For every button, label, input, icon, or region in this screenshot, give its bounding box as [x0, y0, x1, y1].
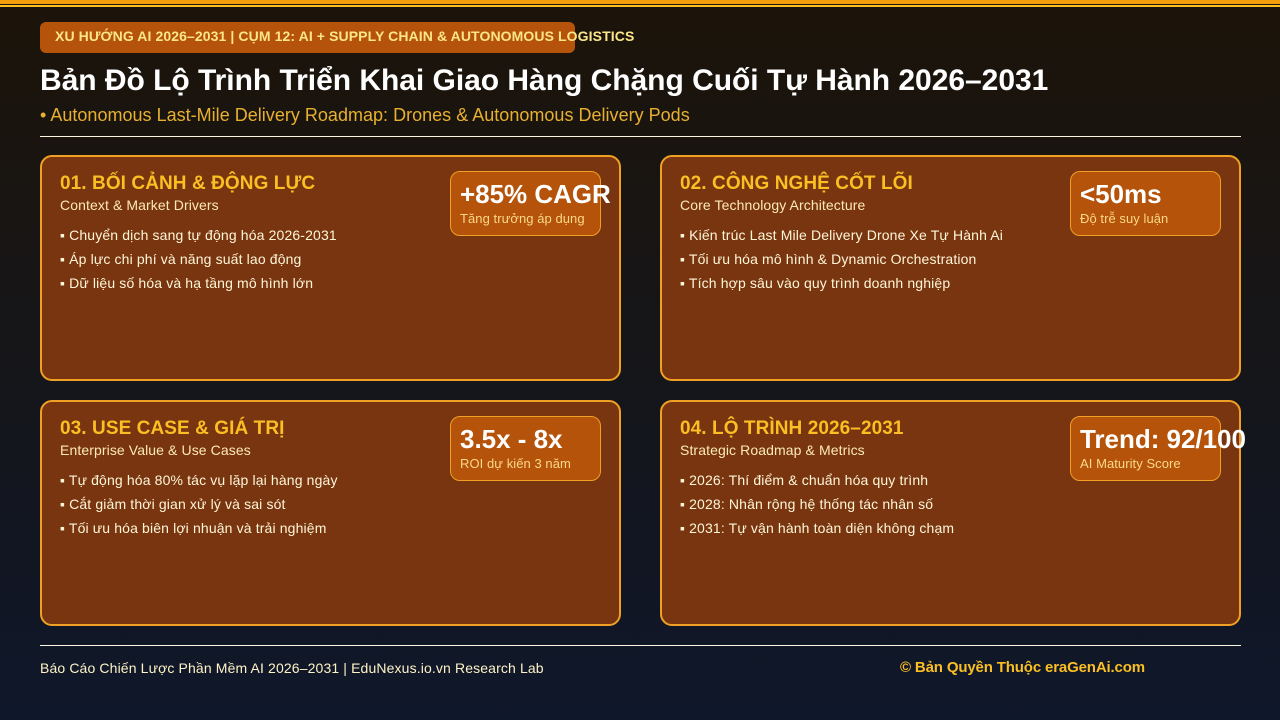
- metric: latency: [1070, 171, 1221, 236]
- bullet list: ▪ Tối ưu hóa biên lợi nhuận và trải nghiệm: [60, 520, 327, 536]
- metric: ROI: ROI dự kiến 3 năm: [460, 456, 571, 471]
- bullet list: ▪ Tích hợp sâu vào quy trình doanh nghiệp: [680, 275, 950, 291]
- metric: trend score: [1070, 416, 1221, 481]
- panel heading: 01. BỐI CẢNH & ĐỘNG LỰC: [60, 173, 315, 194]
- metric: trend score: AI Maturity Score: [1080, 456, 1181, 471]
- metric: growth: Tăng trưởng áp dụng: [460, 211, 585, 226]
- panel heading: 02. CÔNG NGHỆ CỐT LÕI: [680, 173, 913, 194]
- metric: growth: [450, 171, 601, 236]
- bullet list: [680, 227, 1003, 291]
- bullet list: ▪ Cắt giảm thời gian xử lý và sai sót: [60, 496, 286, 512]
- panel heading: 03. USE CASE & GIÁ TRỊ: [60, 418, 285, 439]
- bullet list: ▪ 2031: Tự vận hành toàn diện không chạm: [680, 520, 954, 536]
- bullet list: ▪ 2028: Nhân rộng hệ thống tác nhân số: [680, 496, 933, 512]
- bullet list: ▪ Chuyển dịch sang tự động hóa 2026-2031: [60, 227, 337, 243]
- bullet list: ▪ Áp lực chi phí và năng suất lao động: [60, 251, 301, 267]
- bullet list: [680, 472, 954, 536]
- panel: context and market drivers: [40, 155, 621, 381]
- bullet list: [60, 472, 338, 536]
- metric: ROI: 3.5x - 8x: [460, 424, 562, 454]
- panel: roadmap: [660, 400, 1241, 626]
- panel subheading: Enterprise Value & Use Cases: [60, 442, 251, 458]
- bullet list: ▪ 2026: Thí điểm & chuẩn hóa quy trình: [680, 472, 928, 488]
- panel: core technology: [660, 155, 1241, 381]
- bullet list: ▪ Tối ưu hóa mô hình & Dynamic Orchestration: [680, 251, 976, 267]
- panel subheading: Core Technology Architecture: [680, 197, 865, 213]
- metric: latency: <50ms: [1080, 179, 1162, 209]
- bullet list: [60, 227, 337, 291]
- panel heading: 04. LỘ TRÌNH 2026–2031: [680, 418, 904, 439]
- panel: use cases and value: [40, 400, 621, 626]
- panel subheading: Strategic Roadmap & Metrics: [680, 442, 865, 458]
- bullet list: ▪ Tự động hóa 80% tác vụ lặp lại hàng ngày: [60, 472, 338, 488]
- title: Bản Đồ Lộ Trình Triển Khai Giao Hàng Chặng Cuối Tự Hành 2026–2031: [40, 64, 1048, 97]
- footer divider: [40, 645, 1241, 646]
- panel subheading: Context & Market Drivers: [60, 197, 219, 213]
- footer source: Báo Cáo Chiến Lược Phần Mềm AI 2026–2031 | EduNexus.io.vn Research Lab: [40, 660, 544, 676]
- metric: ROI: [450, 416, 601, 481]
- badge text: XU HƯỚNG AI 2026–2031 | CỤM 12: AI + SUPPLY CHAIN & AUTONOMOUS LOGISTICS: [55, 28, 634, 44]
- bullet list: ▪ Kiến trúc Last Mile Delivery Drone Xe Tự Hành Ai: [680, 227, 1003, 243]
- top accent bar: [0, 0, 1280, 7]
- subtitle: • Autonomous Last-Mile Delivery Roadmap: Drones & Autonomous Delivery Pods: [40, 105, 690, 125]
- header divider: [40, 136, 1241, 137]
- metric: growth: +85% CAGR: [460, 179, 611, 209]
- metric: trend score: Trend: 92/100: [1080, 424, 1246, 454]
- bullet list: ▪ Dữ liệu số hóa và hạ tầng mô hình lớn: [60, 275, 313, 291]
- footer copyright: © Bản Quyền Thuộc eraGenAi.com: [900, 659, 1145, 676]
- category badge: [40, 22, 575, 53]
- metric: latency: Độ trễ suy luận: [1080, 211, 1168, 226]
